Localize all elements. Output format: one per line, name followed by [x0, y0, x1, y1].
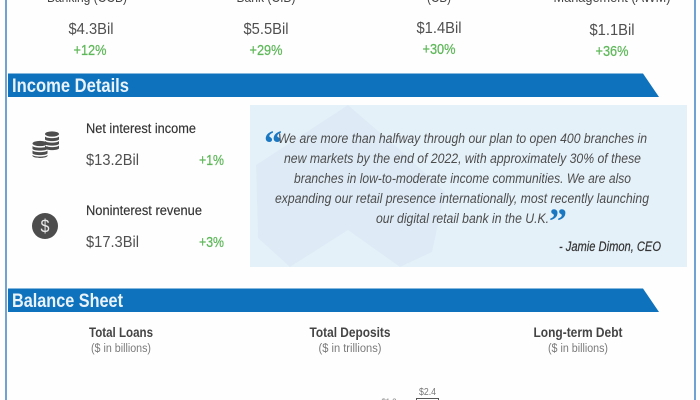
quote text: [264, 123, 649, 241]
segment: Commercial Banking: +30%: [422, 42, 456, 58]
segment: Commercial Banking: $1.4Bil: [416, 20, 462, 37]
stat: net interest income: Net interest income: [86, 121, 196, 136]
segment: Asset and Wealth Management: [554, 0, 670, 60]
chart heading: Total Deposits: Total Deposits: [310, 324, 391, 340]
chart heading: Long-term Debt: [534, 324, 623, 355]
heading: Income Details: [8, 74, 659, 97]
chart heading: Long-term Debt: ($ in billions): [548, 343, 608, 355]
segment: Asset and Wealth Management: +36%: [596, 44, 629, 60]
stat: net interest income: $13.2Bil: [86, 152, 139, 169]
segment: Consumer Banking: $4.3Bil: [68, 21, 114, 38]
segment: Commercial Banking: [416, 0, 462, 58]
quote text: new markets by the end of 2022, with approximately 30% of these: [284, 151, 641, 166]
segment: Corporate and Investment Bank: [236, 0, 296, 59]
segment: Corporate and Investment Bank: +29%: [250, 43, 283, 59]
icon: coin stacks: [32, 131, 59, 158]
stat: net interest income: [86, 121, 224, 169]
quote text: our digital retail bank in the U.K.: [376, 211, 549, 226]
heading: Balance Sheet: Balance Sheet: [12, 291, 124, 312]
panel: CEO quote: [250, 105, 687, 267]
stat: noninterest revenue: Noninterest revenue: [86, 203, 202, 218]
chart heading: Total Deposits: ($ in trillions): [318, 343, 382, 355]
bar chart: total deposits, top of bars: [382, 387, 438, 400]
segment: Consumer Banking: [47, 0, 127, 59]
chart heading: Total Deposits: [310, 324, 391, 355]
quote attribution: - Jamie Dimon, CEO: [559, 239, 661, 254]
stat: net interest income: +1%: [199, 153, 224, 169]
quote text: branches in low-to-moderate income communities. We are also: [294, 171, 631, 186]
heading: Income Details: Income Details: [12, 76, 129, 97]
chart heading: Total Loans: ($ in billions): [91, 343, 151, 355]
quote text: expanding our retail presence internationally, most recently launching: [275, 191, 649, 206]
quote text: ”: [549, 201, 567, 241]
chart heading: Total Loans: [89, 324, 153, 355]
stat: noninterest revenue: [86, 203, 224, 251]
chart heading: Long-term Debt: Long-term Debt: [534, 324, 623, 340]
bar chart: total deposits, top of bars: $2.4: [419, 387, 436, 398]
icon: dollar coin: [32, 213, 58, 239]
segment: Asset and Wealth Management: $1.1Bil: [590, 22, 634, 39]
segment: Consumer Banking: +12%: [74, 43, 107, 59]
heading: Balance Sheet: [8, 288, 659, 312]
chart heading: Total Loans: Total Loans: [89, 324, 153, 340]
segment: Corporate and Investment Bank: $5.5Bil: [244, 21, 288, 38]
icon: dollar coin: $: [40, 216, 50, 236]
quote text: We are more than halfway through our plan to open 400 branches in: [278, 131, 647, 146]
stat: noninterest revenue: +3%: [199, 235, 224, 251]
stat: noninterest revenue: $17.3Bil: [86, 234, 139, 251]
quote text: “: [264, 123, 282, 163]
